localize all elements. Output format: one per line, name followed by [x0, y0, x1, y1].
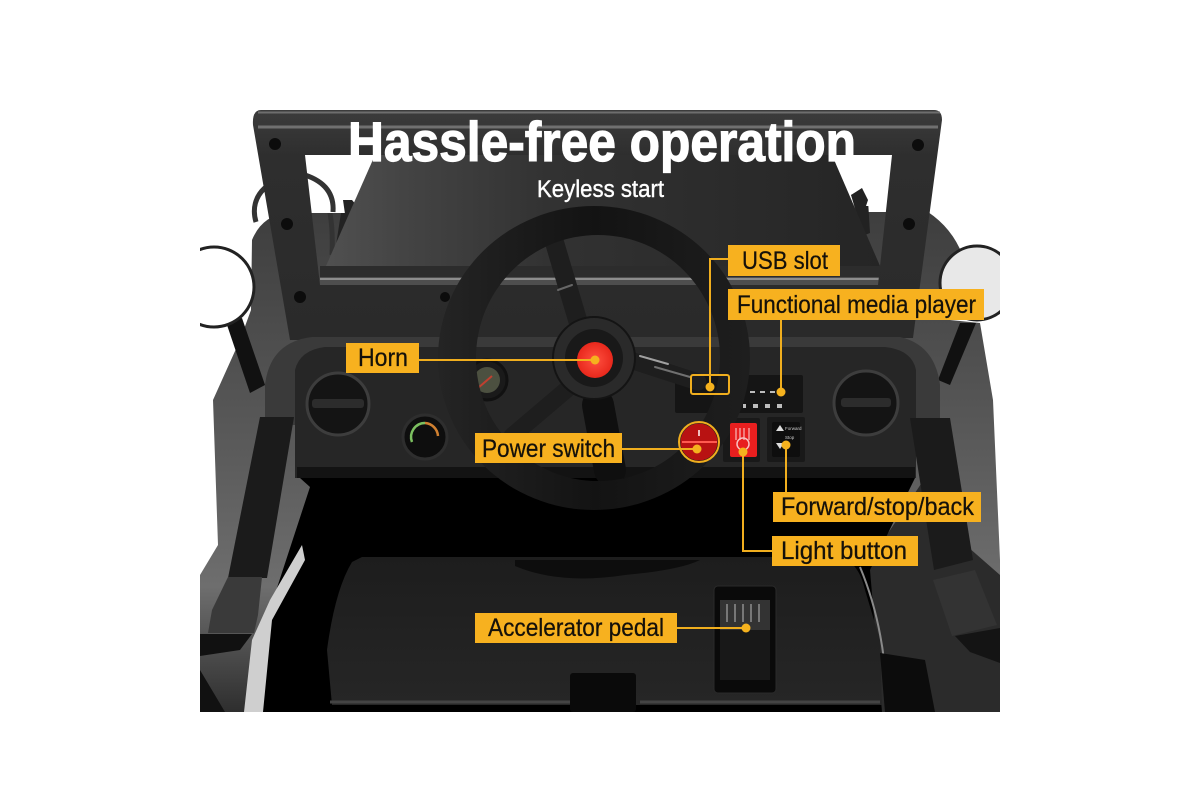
callout: USB slot — [691, 245, 840, 394]
callout: accelerator pedal — [475, 613, 750, 643]
right vent — [834, 371, 898, 435]
callout: light button: Light button — [781, 537, 907, 565]
black interior — [262, 478, 915, 712]
light button — [730, 423, 757, 457]
steering hub — [553, 317, 635, 399]
dark corner lower right — [880, 653, 935, 712]
switch panel — [675, 375, 805, 462]
callout: accelerator pedal: Accelerator pedal — [488, 614, 664, 642]
right mirror — [938, 244, 1000, 322]
windshield frame — [253, 110, 942, 340]
left seat belt — [200, 417, 294, 656]
media buttons — [743, 391, 782, 408]
left vent — [307, 373, 369, 435]
callout: USB slot: USB slot — [742, 247, 828, 275]
accelerator pedal — [714, 586, 776, 693]
dash lower shadow — [297, 467, 915, 478]
mirror arm right — [938, 323, 976, 385]
callout: functional media player — [728, 289, 984, 396]
photo: ride-on jeep dashboard — [174, 110, 1014, 712]
battery gauge — [404, 416, 446, 458]
mirror arm left — [226, 318, 265, 393]
right side panel shadow — [870, 485, 1000, 702]
callout: functional media player: Functional media player — [737, 291, 976, 319]
callout: forward stop back — [773, 440, 981, 522]
speed gauge — [476, 358, 508, 402]
dashboard panel — [295, 347, 916, 478]
callout: forward stop back: Forward/stop/back — [781, 493, 974, 521]
safety label — [244, 545, 305, 712]
right seat belt — [910, 418, 1000, 663]
horn button — [577, 342, 613, 378]
callout: power switch: Power switch — [482, 435, 615, 463]
forward stop back switch — [772, 422, 802, 457]
cowl strip — [320, 266, 880, 277]
left hoop and knob — [252, 186, 348, 255]
right knob — [851, 194, 870, 234]
callout: horn: Horn — [358, 344, 408, 372]
power switch — [680, 424, 718, 460]
windshield — [326, 155, 880, 266]
left knob over white — [343, 200, 354, 213]
callout: light button — [738, 448, 918, 566]
floor notch — [570, 673, 636, 712]
hood section — [292, 287, 912, 338]
subtitle: Keyless start — [537, 176, 664, 203]
callout: power switch — [475, 422, 719, 463]
frame top highlights — [258, 112, 940, 114]
white window side patches — [307, 173, 354, 213]
left mirror — [200, 246, 256, 328]
title: Hassle-free operation — [348, 110, 856, 173]
dashboard upper arc — [265, 337, 940, 425]
frame bolts — [269, 138, 924, 303]
right knob over white — [851, 188, 868, 206]
steering column and spokes — [512, 234, 698, 470]
footwell floor panel — [327, 557, 882, 705]
dark corner lower left — [200, 670, 225, 712]
steering wheel rim — [438, 206, 750, 510]
callout: horn — [346, 343, 600, 373]
forward stop back switch: Forward — [785, 426, 802, 431]
forward stop back switch: Stop — [785, 435, 795, 440]
left hoop over white — [305, 175, 333, 212]
car body silhouette — [200, 212, 1000, 712]
